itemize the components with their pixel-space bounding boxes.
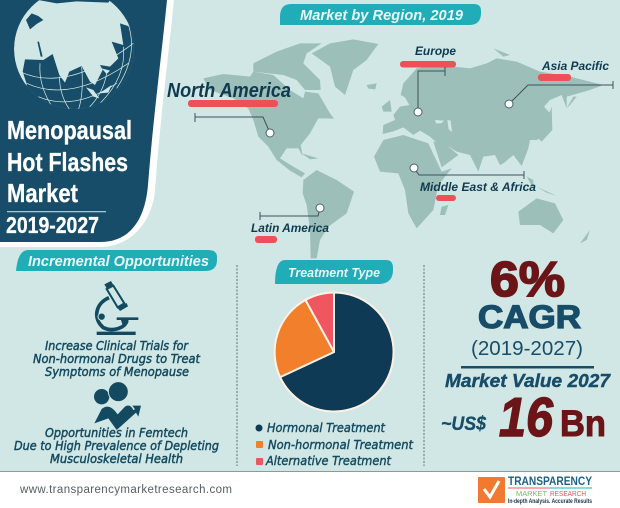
stat: market value: ~US$ <box>441 414 486 435</box>
logo: In-depth Analysis. Accurate Results <box>508 499 593 505</box>
logo: MARKET <box>516 491 548 498</box>
text: clinical trials <box>33 339 201 379</box>
legend: Non-hormonal Treatment <box>268 438 414 452</box>
stat: CAGR: CAGR <box>478 299 581 335</box>
stat: CAGR <box>461 253 594 368</box>
region: Asia Pacific <box>505 61 613 108</box>
globe <box>14 0 134 109</box>
text: clinical trials: Symptoms of Menopause <box>45 365 189 379</box>
region: Middle East and Africa: Middle East & Africa <box>420 182 537 194</box>
icon: people with arrow <box>94 382 141 430</box>
legend <box>256 421 414 468</box>
heading: treatment type: Treatment Type <box>288 265 380 280</box>
region: North America: North America <box>167 80 291 102</box>
world map <box>203 39 603 258</box>
region: North America <box>167 80 291 137</box>
website url: www.transparencymarketresearch.com <box>19 484 232 496</box>
stat: market value <box>441 371 611 448</box>
region: Asia Pacific: Asia Pacific <box>541 61 610 73</box>
title text: Menopausal <box>7 115 132 145</box>
logo <box>478 474 593 505</box>
title text: 2019-2027 <box>6 212 99 238</box>
text: femtech: Opportunities in Femtech <box>45 426 188 440</box>
legend: Hormonal Treatment <box>267 421 386 435</box>
pie chart <box>275 292 394 411</box>
region: Latin America <box>251 204 330 243</box>
stat: market value: Market Value 2027 <box>445 371 611 391</box>
stat: market value: Bn <box>560 403 606 444</box>
region: Latin America: Latin America <box>251 223 330 235</box>
region: Europe <box>400 46 457 116</box>
region: Middle East and Africa <box>410 164 537 201</box>
heading: treatment type <box>275 260 393 284</box>
stat: CAGR: 6% <box>490 253 565 307</box>
icon: microscope <box>97 281 138 335</box>
title text: Market <box>7 178 78 208</box>
heading: market by region <box>280 4 481 25</box>
text: femtech <box>14 426 219 466</box>
text: clinical trials: Increase Clinical Trials for <box>45 339 189 353</box>
region: Europe: Europe <box>415 46 457 58</box>
text: clinical trials: Non-hormonal Drugs to Treat <box>33 352 201 366</box>
title panel <box>0 0 174 247</box>
stat: CAGR: (2019-2027) <box>471 338 583 360</box>
title text <box>6 115 132 238</box>
heading: incremental opportunities <box>16 250 217 271</box>
logo: RESEARCH <box>550 491 586 498</box>
title text: Hot Flashes <box>7 147 128 177</box>
logo: TRANSPARENCY <box>508 474 592 488</box>
text: femtech: Musculoskeletal Health <box>50 452 183 466</box>
legend: Alternative Treatment <box>265 454 392 468</box>
heading: market by region: Market by Region, 2019 <box>300 8 463 24</box>
stat: market value: 16 <box>499 386 553 448</box>
text: femtech: Due to High Prevalence of Depleting <box>14 439 219 453</box>
heading: incremental opportunities: Incremental Opportunities <box>28 254 209 270</box>
